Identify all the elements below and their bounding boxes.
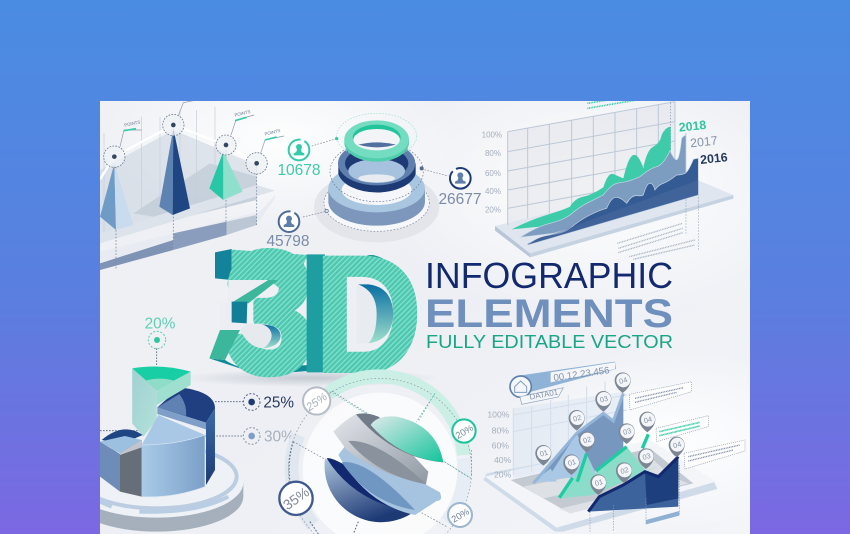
- slice: teal: [132, 366, 191, 437]
- caption lines: [617, 223, 695, 259]
- badge: 20% blue: [448, 503, 472, 527]
- subtitle: FULLY EDITABLE VECTOR: FULLY EDITABLE VECTOR: [426, 332, 673, 352]
- label: 30%: 30%: [264, 429, 295, 446]
- chart: sphere donut: [279, 376, 476, 534]
- pins: 02: [572, 413, 582, 424]
- y axis labels: 40%: [494, 455, 512, 465]
- area 2016: [528, 158, 698, 245]
- pins: 02: [619, 465, 630, 476]
- pins: 03: [622, 426, 632, 437]
- pins: [535, 372, 685, 495]
- stat: 26677: 26677: [438, 191, 482, 208]
- pins: 04: [643, 414, 653, 425]
- callouts: [629, 382, 745, 469]
- year labels: 2017: [689, 134, 718, 150]
- panel: light background: [100, 101, 750, 534]
- digit 3: [209, 248, 307, 378]
- pins: 04: [672, 439, 682, 450]
- axis labels: 20%: [485, 206, 501, 215]
- base disc: [100, 444, 244, 532]
- stat: 10678: 10678: [277, 162, 321, 179]
- icon: teal pyramid: [209, 152, 243, 200]
- badge: 25%: 25%: [303, 391, 330, 414]
- pins: 03: [599, 394, 609, 405]
- badge: 20% teal: 20%: [454, 423, 475, 441]
- title: ELEMENTS: ELEMENTS: [425, 292, 673, 336]
- peaks: teal: [559, 434, 660, 498]
- badge: 20% teal: [452, 419, 476, 443]
- pins: 03: [641, 451, 652, 462]
- small point labels: POINTS: [124, 119, 141, 128]
- small point labels: POINTS: [264, 128, 281, 137]
- chart: stacked rings: [279, 113, 471, 242]
- year labels: 2018: [678, 118, 707, 135]
- sphere lower: [325, 442, 441, 522]
- title: INFOGRAPHIC: INFOGRAPHIC: [425, 255, 673, 296]
- chart: pyramids line chart: [100, 100, 284, 270]
- title: 3D lettering: [209, 248, 418, 378]
- pins: 01: [539, 448, 549, 459]
- pins: 01: [567, 457, 577, 468]
- slice: light blue: [142, 415, 205, 497]
- digit 3: 3: [226, 218, 313, 408]
- label: data header: DATA01: [529, 388, 559, 402]
- year labels: 2016: [699, 150, 728, 167]
- slice: left segments: [100, 429, 143, 497]
- axis labels: 40%: [485, 187, 501, 196]
- y axis labels: 60%: [492, 440, 509, 450]
- label: 25%: 25%: [263, 394, 294, 411]
- label: data header: [509, 362, 616, 404]
- digit D: D: [314, 222, 422, 408]
- icon: light blue pyramid: [100, 163, 133, 230]
- marker nodes: [104, 114, 267, 174]
- pins: 02: [582, 434, 592, 445]
- pins: 01: [594, 477, 604, 488]
- axis labels: 100%: [482, 130, 502, 139]
- chart: 3D pie on disc: [100, 318, 294, 532]
- year labels: [679, 120, 728, 164]
- icon: user 10678: [289, 140, 309, 160]
- y axis labels: 20%: [494, 470, 512, 480]
- y axis labels: 100%: [487, 410, 510, 420]
- icon: user 45798: [279, 211, 299, 232]
- pins: 04: [618, 375, 628, 386]
- axis labels: 80%: [485, 149, 501, 158]
- area 2018: [512, 127, 671, 229]
- axis labels: [482, 130, 502, 215]
- y axis labels: [487, 410, 512, 480]
- icon: user 26677: [450, 168, 471, 189]
- slice: navy: [157, 387, 215, 485]
- icon: teal dot: [148, 331, 166, 349]
- sphere upper: [333, 413, 443, 484]
- small point labels: [124, 109, 281, 137]
- icon: navy dot: [243, 394, 260, 410]
- tablet: [483, 440, 717, 532]
- icon: navy pyramid: [159, 128, 190, 215]
- peaks: navy: [588, 457, 678, 512]
- stat: 45798: 45798: [266, 233, 310, 250]
- peaks: back blue: [533, 393, 623, 483]
- badge: 20% blue: 20%: [450, 507, 471, 525]
- icon: blue dot: [243, 428, 260, 444]
- y axis labels: 80%: [492, 426, 509, 436]
- label: data header: 00.12.23.456: [553, 365, 610, 384]
- badge: 35%: 35%: [280, 484, 312, 513]
- outer ring: [292, 376, 465, 525]
- chart: tablet peaks: [483, 362, 745, 532]
- axis labels: 60%: [485, 169, 501, 178]
- small point labels: POINTS: [234, 109, 251, 118]
- area 2017: [520, 135, 686, 237]
- platform: [495, 178, 733, 257]
- digit D: [306, 254, 418, 373]
- chart: yearly area chart: [482, 95, 733, 259]
- label: 20%: 20%: [145, 315, 176, 332]
